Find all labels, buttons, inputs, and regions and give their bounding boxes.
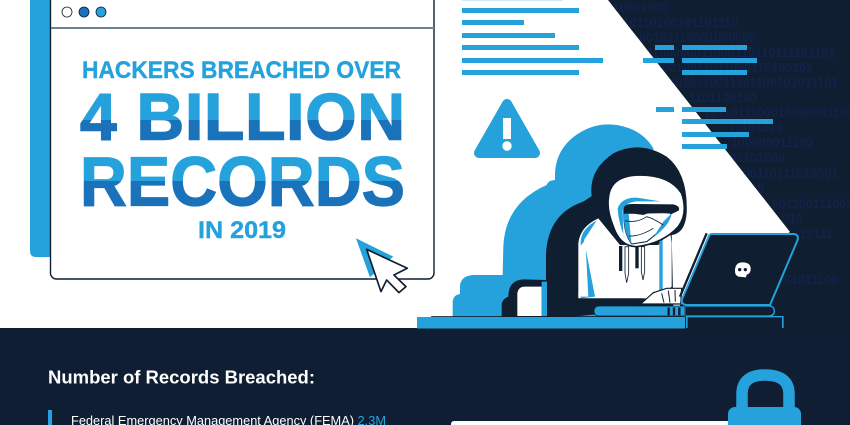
title: RECORDS <box>80 142 405 220</box>
icon: padlock <box>728 375 801 425</box>
desk <box>432 317 685 329</box>
dark diagonal background <box>608 0 850 328</box>
binary code background: 100000011100 <box>731 136 813 150</box>
blue silhouette <box>453 124 653 317</box>
chest <box>578 218 672 298</box>
icon: skull <box>735 262 751 277</box>
binary code background: 10001000 <box>612 1 668 15</box>
title: 4 BILLION <box>80 80 405 154</box>
code lines: left group <box>462 0 603 75</box>
dark footer panel <box>0 328 850 425</box>
binary code background: 01010110011101100101011101 <box>661 76 838 90</box>
hand <box>641 288 682 304</box>
mask <box>624 213 672 244</box>
icon: warning triangle <box>479 104 535 153</box>
binary code background: 010 <box>782 212 803 226</box>
white block <box>517 287 542 316</box>
heading: number of records breached: Number of Records Breached: <box>48 366 315 388</box>
binary code background: 10 <box>750 182 764 196</box>
visor <box>623 204 679 215</box>
title: IN 2019 <box>198 217 286 244</box>
binary code background: 1101100100 <box>689 91 757 105</box>
code lines: right group <box>643 45 773 149</box>
binary code background: 000010011011000110100101 <box>648 61 813 75</box>
hoodie body <box>502 147 687 317</box>
desk right edge lines <box>687 316 783 328</box>
desk right part <box>687 317 783 329</box>
binary code background: 110110100101101110 <box>616 16 738 30</box>
binary code background: 11101010 <box>729 121 783 135</box>
hacker illustration <box>432 124 798 333</box>
window buttons <box>62 7 106 17</box>
desk front <box>417 317 685 328</box>
face shadow <box>618 198 661 243</box>
binary code background: 10111 <box>800 227 833 241</box>
binary code background: 00110111010001 <box>743 167 838 181</box>
title: HACKERS BREACHED OVER <box>82 57 401 84</box>
browser window <box>50 0 434 279</box>
title <box>80 57 405 244</box>
white card <box>451 421 741 425</box>
browser side strip <box>30 0 52 257</box>
laptop screen <box>680 233 707 297</box>
binary code background: 11101000 <box>731 151 785 165</box>
icon: mouse cursor <box>356 238 407 293</box>
binary code background <box>612 1 850 287</box>
binary code background: 01011100 <box>784 273 838 287</box>
binary code background: 00101110001000000 <box>639 31 756 45</box>
laptop base <box>685 306 774 316</box>
binary code background: 0100000011000110110111101101 <box>645 46 835 60</box>
hood strings <box>619 246 622 271</box>
hood opening <box>608 175 684 247</box>
